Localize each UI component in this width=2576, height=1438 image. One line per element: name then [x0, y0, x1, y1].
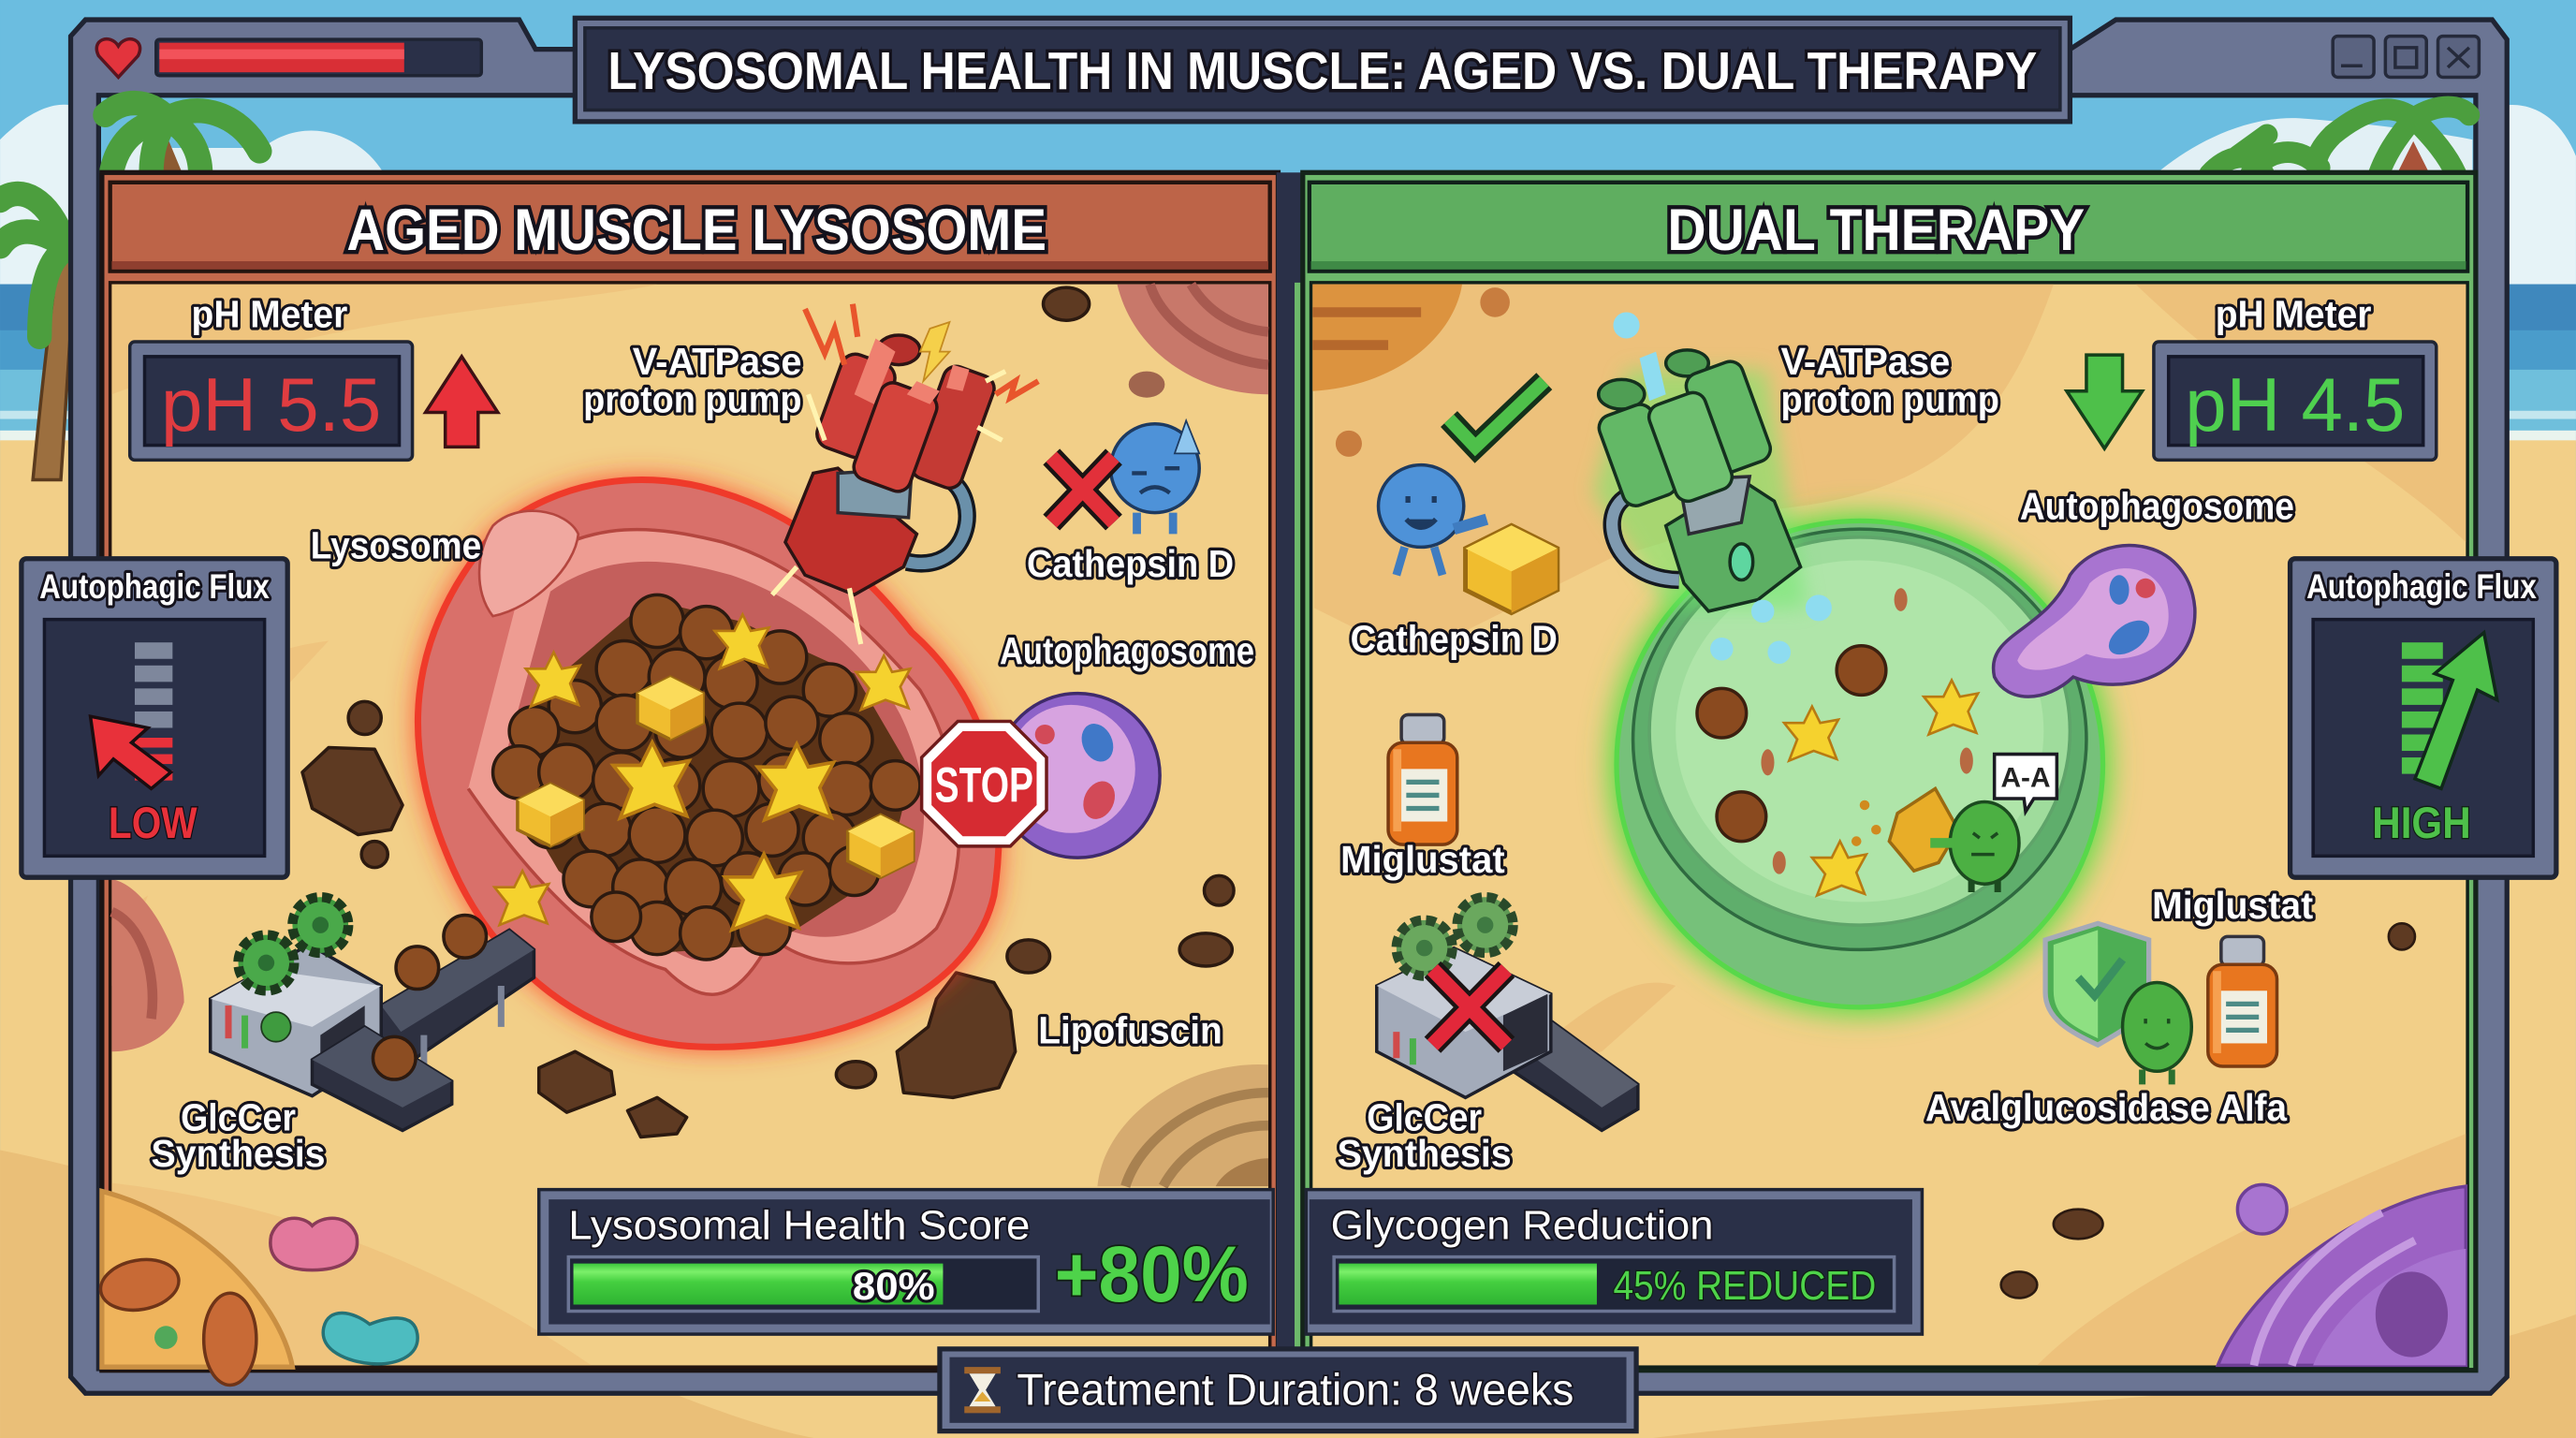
label: pH meter treated: pH Meter [2216, 292, 2372, 335]
decor: beach tone patches [111, 285, 657, 1365]
speech bubble: A-A: A-A [2000, 763, 2051, 794]
label: GlcCer aged: GlcCer [181, 1095, 296, 1138]
decor: purple organelle bottom right [2217, 1184, 2466, 1365]
label: pH meter aged: pH Meter [192, 292, 348, 335]
label: V-ATPase aged [583, 340, 802, 421]
health heart [96, 39, 140, 77]
decor: lipofuscin bits [2001, 923, 2415, 1298]
decor: cell bottom left [96, 1191, 292, 1385]
glycogen remnants [1697, 588, 1978, 895]
treatment duration bar: Treatment Duration: 8 weeks [1017, 1366, 1573, 1416]
score panel: lysosomal health: Lysosomal Health Score [568, 1202, 1030, 1248]
arrow: flux up [2415, 633, 2497, 788]
panel: aged muscle lysosome [96, 172, 1278, 1385]
icon: miglustat bottle [1388, 714, 1457, 844]
label: miglustat right: Miglustat [2152, 884, 2313, 927]
icon: stop sign: STOP [935, 757, 1033, 813]
score panel: lysosomal health: 80% [853, 1264, 935, 1308]
title: LYSOSOMAL HEALTH IN MUSCLE: AGED VS. DUAL THERAPY [607, 41, 2037, 100]
flux panel: low: LOW [109, 799, 198, 848]
label: GlcCer aged: Synthesis [152, 1132, 326, 1175]
bars: flux high [2402, 642, 2443, 774]
treatment duration bar [940, 1349, 1636, 1431]
label: lipofuscin: Lipofuscin [1038, 1008, 1222, 1051]
health bar [156, 39, 481, 76]
icon: proton pump failing [772, 304, 1038, 644]
label: autophagosome treated: Autophagosome [2020, 485, 2294, 528]
arrow: flux down [91, 716, 171, 788]
decor: tan fibre bottom right [1097, 1064, 1268, 1186]
icon: cathepsin D inactive [1051, 420, 1199, 534]
lipofuscin clumps [302, 287, 1234, 1137]
label: GlcCer treated: Synthesis [1338, 1132, 1512, 1175]
pH display treated [2154, 342, 2437, 460]
panel header: aged [110, 183, 1270, 271]
arrow: pH up [426, 357, 498, 447]
lysosome: aged [417, 480, 999, 1047]
decor: muscle fibre left [111, 879, 184, 1051]
window buttons [2333, 37, 2479, 77]
glycogen stars and cubes [494, 614, 914, 930]
bars: flux low [135, 642, 172, 727]
panel: dual therapy [1303, 172, 2476, 1371]
decor: beach tone patches [1314, 285, 2466, 1365]
decor: muscle fibre top right [1117, 285, 1268, 394]
icon: stop sign [922, 721, 1046, 846]
flux panel: high [2291, 559, 2556, 877]
panel header: aged: AGED MUSCLE LYSOSOME [346, 198, 1046, 263]
pH display aged [130, 342, 413, 460]
icon: autophagosome fusing [1994, 546, 2195, 697]
lysosome: treated [1610, 514, 2110, 1014]
label: GlcCer treated [1338, 1095, 1512, 1175]
panel header: dual [1310, 183, 2467, 271]
label: avalglucosidase alfa: Avalglucosidase Alfa [1925, 1086, 2288, 1129]
speech bubble: A-A [1995, 755, 2056, 812]
icon: enzyme breaking glycogen [1852, 788, 2019, 892]
flux panel: low: Autophagic Flux [39, 567, 270, 606]
icon: GlcCer factory blocked [1377, 897, 1638, 1130]
flux panel: high: HIGH [2372, 799, 2471, 848]
title [575, 18, 2070, 122]
icon: GlcCer factory active [211, 897, 534, 1130]
divider [1277, 172, 1303, 1369]
label: V-ATPase treated: V-ATPase [1781, 340, 1950, 383]
label: V-ATPase aged: proton pump [583, 378, 802, 421]
label: lysosome: Lysosome [311, 524, 481, 567]
label: miglustat left: Miglustat [1340, 838, 1505, 881]
arrow: pH down [2067, 355, 2143, 448]
icon: check mark [1449, 381, 1544, 447]
label: cathepsin D treated: Cathepsin D [1351, 618, 1558, 661]
reduction panel: glycogen: Glycogen Reduction [1331, 1202, 1714, 1248]
lipid and glycogen cluster [493, 594, 920, 960]
score panel: lysosomal health [539, 1190, 1273, 1334]
label: V-ATPase treated: proton pump [1781, 378, 1999, 421]
icon: autophagosome blocked [996, 694, 1160, 858]
icon: miglustat bottle with shield [2208, 936, 2277, 1066]
mitochondrion: teal [323, 1313, 417, 1364]
mitochondrion: pink [271, 1218, 358, 1270]
label: V-ATPase treated [1781, 340, 1999, 421]
pH display aged: pH 5.5 [161, 363, 381, 448]
score panel: lysosomal health: +80% [1055, 1230, 1249, 1318]
label: V-ATPase aged: V-ATPase [633, 340, 802, 383]
palm tree: far left [0, 194, 71, 479]
icon: avalglucosidase alfa character [2123, 983, 2191, 1084]
label: autophagosome aged: Autophagosome [1000, 629, 1254, 672]
label: cathepsin D aged: Cathepsin D [1027, 542, 1234, 585]
panel header: dual: DUAL THERAPY [1667, 198, 2085, 263]
pH display treated: pH 4.5 [2185, 363, 2405, 448]
decor: fibre top left [1312, 285, 1510, 457]
icon: shield [2045, 923, 2149, 1045]
icon: cathepsin D active [1379, 465, 1558, 613]
palm tree: top left [105, 103, 259, 178]
palm trees: top right [2210, 107, 2469, 178]
label: GlcCer aged [152, 1095, 326, 1175]
label: GlcCer treated: GlcCer [1367, 1095, 1482, 1138]
reduction panel: glycogen: 45% REDUCED [1613, 1263, 1876, 1309]
icon: hourglass [964, 1371, 1001, 1410]
icon: proton pump working [1593, 312, 1832, 664]
reduction panel: glycogen [1306, 1190, 1922, 1334]
flux panel: high: Autophagic Flux [2306, 567, 2537, 606]
flux panel: low [22, 559, 287, 877]
